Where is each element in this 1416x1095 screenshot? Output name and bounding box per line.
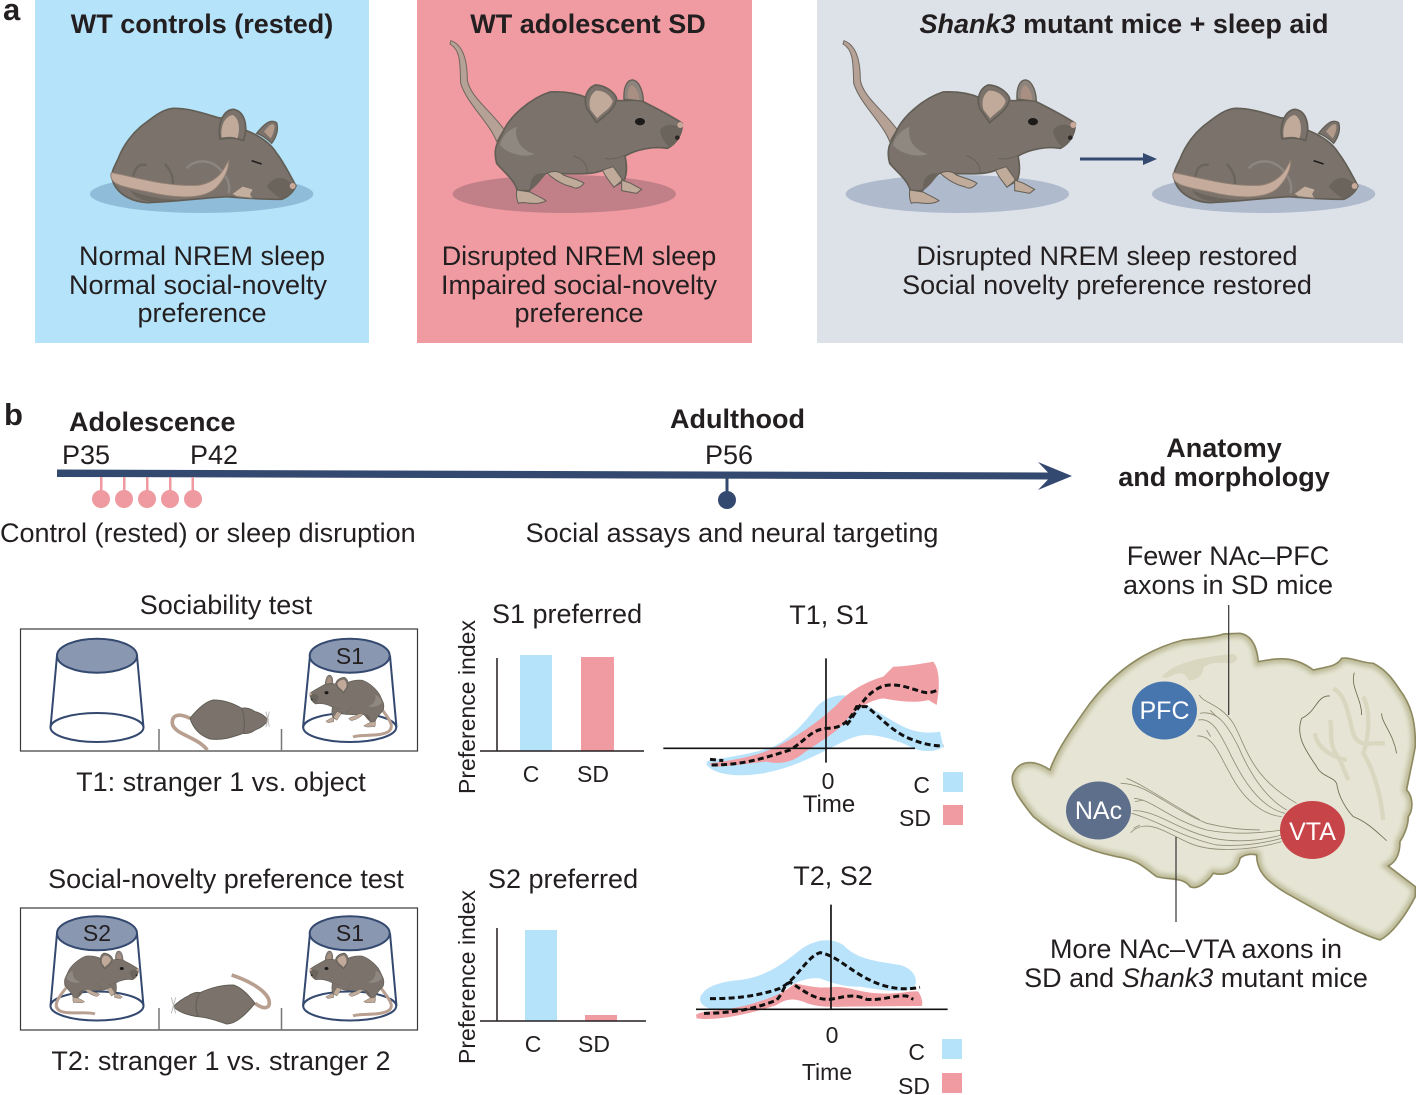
line chart: T1, S1: SD — [899, 805, 931, 831]
arrow: timeline axis — [57, 462, 1072, 490]
icon: sleeping mouse with shadow — [90, 108, 313, 213]
line chart: T2, S2 — [696, 861, 962, 1095]
heading: sociability test: Sociability test — [140, 590, 313, 620]
text: more NAc–VTA axons: More NAc–VTA axons in — [1050, 934, 1342, 964]
icon: cup with stranger 1 mouse: S1 — [336, 643, 364, 669]
icon: cup with stranger 1 mouse — [303, 916, 396, 1020]
bar chart: S2 preferred — [454, 864, 646, 1064]
bar chart: S2 preferred: C — [525, 1031, 541, 1057]
heading: anatomy and morphology: and morphology — [1118, 462, 1330, 492]
panel: Shank3 mutant mice + sleep aid — [817, 0, 1403, 343]
heading: WT controls: WT controls (rested) — [71, 9, 333, 39]
bar chart: S1 preferred: Preference index — [454, 620, 480, 794]
text: WT controls outcome: preference — [137, 298, 267, 328]
node: NAc: NAc — [1075, 797, 1122, 825]
node: PFC: PFC — [1140, 697, 1190, 725]
text: SD outcome: Impaired social-novelty — [441, 270, 718, 300]
heading: WT adolescent SD: WT adolescent SD — [470, 9, 706, 39]
line chart: T2, S2: 0 — [826, 1022, 838, 1048]
text: control or disruption: Control (rested) or sleep disruption — [0, 518, 416, 548]
text: SD outcome: Disrupted NREM sleep — [442, 241, 716, 271]
icon: empty object cup — [50, 639, 144, 742]
node: PFC — [1132, 682, 1197, 740]
bar chart: S1 preferred: SD — [577, 761, 609, 787]
line chart: T2, S2: Time — [802, 1059, 852, 1085]
heading: Shank3 mutant mice: Shank3 mutant mice + sleep aid — [920, 9, 1328, 39]
icon: sleeping restored mouse — [1152, 108, 1375, 213]
diagram: T1 chamber — [20, 629, 418, 751]
brain diagram — [1012, 605, 1415, 940]
panel: WT controls (rested) — [35, 0, 369, 343]
icon: cup with stranger 1 mouse: S1 — [336, 920, 364, 946]
text: P42: P42 — [190, 440, 238, 470]
text: fewer NAc–PFC axons: axons in SD mice — [1123, 570, 1333, 600]
bar chart: S1 preferred — [454, 599, 644, 794]
bar chart: S2 preferred: SD — [578, 1031, 610, 1057]
diagram: T2 chamber — [20, 908, 418, 1030]
label: panel b: b — [4, 397, 23, 432]
text: P56: P56 — [705, 440, 753, 470]
line chart: T1, S1 — [663, 600, 963, 831]
panel: WT adolescent SD — [417, 0, 752, 343]
node: NAc — [1066, 782, 1131, 840]
text: P35: P35 — [62, 440, 110, 470]
text: Shank3 outcome: Disrupted NREM sleep restored — [916, 241, 1298, 271]
heading: anatomy and morphology: Anatomy — [1166, 433, 1282, 463]
text: WT controls outcome: Normal NREM sleep — [79, 241, 325, 271]
icon: cup with stranger 2 mouse: S2 — [83, 920, 111, 946]
text: social assays: Social assays and neural targeting — [526, 518, 938, 548]
text: T2 caption: T2: stranger 1 vs. stranger 2 — [51, 1046, 391, 1076]
heading: social-novelty test: Social-novelty preference test — [48, 864, 404, 894]
bar chart: S1 preferred: S1 preferred — [492, 599, 642, 629]
heading: Adolescence: Adolescence — [69, 407, 236, 437]
markers: five sleep disruption days — [92, 477, 202, 508]
text: SD outcome: preference — [514, 298, 644, 328]
node: VTA — [1280, 801, 1345, 859]
icon: cup with stranger 2 mouse — [50, 916, 144, 1020]
icon: cup with stranger 1 mouse — [303, 639, 396, 742]
arrow: restoration — [1080, 153, 1157, 165]
label line: PFC axons — [1228, 605, 1230, 715]
bar chart: S1 preferred: C — [523, 761, 539, 787]
text: WT controls outcome: Normal social-novelty — [69, 270, 328, 300]
line chart: T2, S2: C — [908, 1039, 925, 1065]
icon: standing mouse with shadow — [450, 41, 683, 213]
label line: NAc axons — [1175, 837, 1177, 922]
marker: P56 assays — [718, 477, 736, 509]
bar chart: S2 preferred: Preference index — [454, 890, 480, 1064]
heading: Adulthood: Adulthood — [670, 404, 805, 434]
line chart: T1, S1: Time — [803, 791, 855, 818]
text: T1 caption: T1: stranger 1 vs. object — [76, 767, 366, 797]
line chart: T1, S1: C — [913, 772, 930, 798]
icon: test mouse top view — [172, 700, 269, 750]
text: fewer NAc–PFC axons: Fewer NAc–PFC — [1127, 541, 1329, 571]
timeline — [0, 404, 1072, 548]
line chart: T1, S1: 0 — [822, 768, 834, 794]
icon: standing mutant mouse — [843, 41, 1076, 213]
icon: test mouse top view — [171, 975, 269, 1024]
line chart: T2, S2: T2, S2 — [793, 861, 873, 891]
node: VTA: VTA — [1289, 818, 1336, 846]
line chart: T1, S1: T1, S1 — [789, 600, 869, 630]
bar chart: S2 preferred: S2 preferred — [488, 864, 638, 894]
text: Shank3 outcome: Social novelty preference restored — [902, 270, 1312, 300]
text: more NAc–VTA axons: SD and Shank3 mutant mice — [1024, 963, 1368, 993]
